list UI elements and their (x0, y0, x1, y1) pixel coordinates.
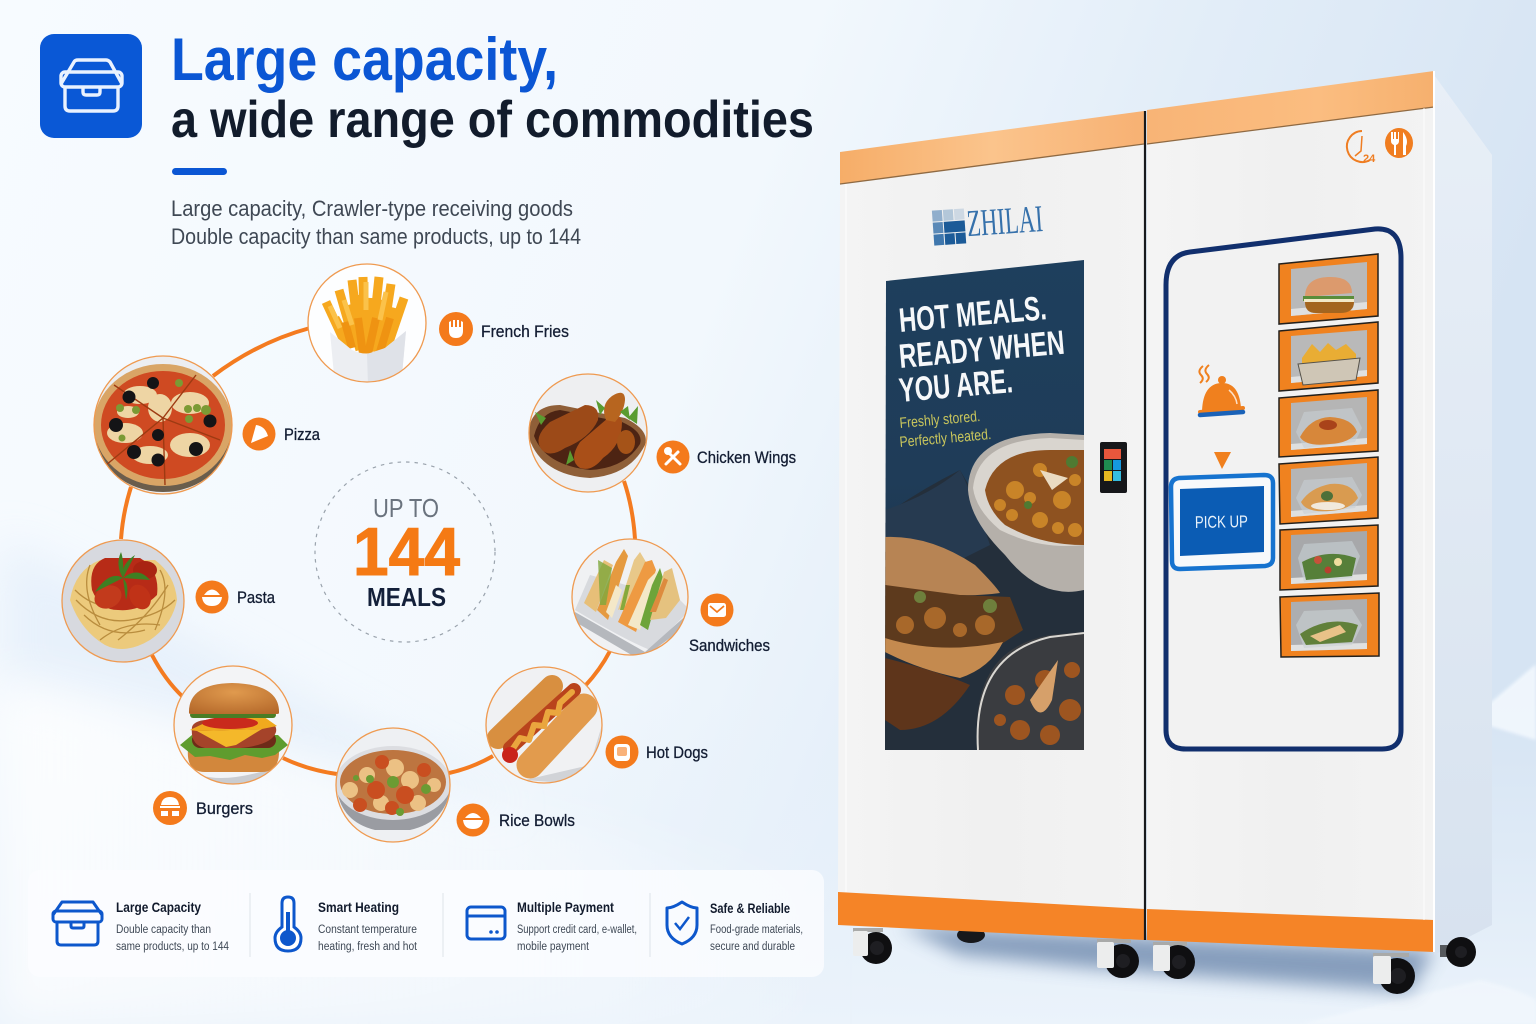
pick up button (1171, 475, 1273, 569)
icons: 24h clock and cutlery (1347, 128, 1413, 165)
top band right (1147, 71, 1434, 144)
door seam (1144, 111, 1146, 940)
poster headline: YOU ARE. (897, 362, 1014, 410)
label: Chicken Wings (656, 440, 796, 474)
pickup window frame (1166, 229, 1401, 749)
label: Sandwiches: Sandwiches (689, 636, 770, 655)
bottom band right (1147, 909, 1434, 952)
poster lower bowl (977, 632, 1084, 750)
label: Pasta: Pasta (237, 588, 275, 607)
label: French Fries (439, 312, 569, 346)
feature: large capacity: Double capacity than (116, 924, 211, 936)
center badge: up to 144 meals: 144 (353, 514, 460, 590)
feature: safe and reliable: Food-grade materials, (710, 924, 803, 936)
compartment: chicken salad (1280, 593, 1379, 657)
food: sandwiches (572, 539, 692, 660)
food: chicken wings (528, 374, 647, 492)
feature: large capacity: same products, up to 144 (116, 941, 230, 953)
machine side panel (1432, 72, 1492, 955)
label: Pizza: Pizza (284, 425, 320, 444)
ring connector arcs (121, 328, 635, 774)
poster headline: READY WHEN (897, 324, 1066, 376)
poster tagline: Perfectly heated. (899, 426, 992, 451)
label: Hot Dogs (606, 736, 708, 768)
right door (1147, 107, 1434, 920)
feature: multiple payment: mobile payment (517, 941, 590, 953)
feature: safe and reliable (667, 901, 803, 953)
compartment: fries (1279, 322, 1378, 391)
label: Burgers: Burgers (196, 799, 253, 818)
feature: multiple payment: Support credit card, e-wallet, (517, 924, 637, 936)
label: Burgers (153, 791, 253, 825)
left door (838, 144, 1144, 910)
compartment: burger (1279, 254, 1378, 324)
label: Hot Dogs: Hot Dogs (646, 743, 708, 762)
title icon: food box (40, 34, 142, 138)
front casters (853, 928, 1415, 994)
center badge: up to 144 meals (315, 462, 495, 642)
panel: feature strip (28, 870, 824, 977)
title accent dash (172, 168, 227, 175)
poster sandwich (885, 537, 1023, 730)
logo: Zhilai (932, 198, 1044, 248)
feature: safe and reliable: Safe & Reliable (710, 901, 790, 916)
icons: 24h clock and cutlery: 24 (1363, 153, 1376, 165)
feature: multiple payment (467, 900, 637, 953)
label: Chicken Wings: Chicken Wings (697, 448, 796, 467)
label: French Fries: French Fries (481, 322, 569, 341)
subtitle: Double capacity than same products, up to 144 (171, 224, 581, 249)
label: Rice Bowls: Rice Bowls (499, 811, 575, 830)
feature: smart heating: Smart Heating (318, 900, 399, 915)
compartment: salad (1280, 525, 1378, 590)
rear caster (1440, 937, 1476, 967)
food: burger (174, 666, 292, 790)
poster (885, 260, 1084, 750)
label: Pasta (196, 580, 275, 614)
food: pizza (94, 356, 232, 494)
top band left (840, 111, 1144, 184)
title (171, 26, 814, 149)
compartment: pasta (1279, 390, 1378, 457)
title: a wide range of commodities (171, 91, 814, 149)
label: Sandwiches (689, 594, 770, 655)
feature: smart heating: Constant temperature (318, 924, 417, 936)
arrow down (1214, 452, 1231, 469)
feature: smart heating: heating, fresh and hot (318, 941, 418, 953)
feature: safe and reliable: secure and durable (710, 941, 795, 953)
poster dark cloth (885, 470, 1084, 750)
poster tagline: Freshly stored. (899, 408, 981, 432)
poster headline (897, 289, 1066, 410)
center badge: up to 144 meals: MEALS (367, 582, 446, 612)
logo: Zhilai: ZHILAI (965, 198, 1044, 245)
pick up button: PICK UP (1195, 512, 1248, 532)
subtitle: Large capacity, Crawler-type receiving goods (171, 196, 573, 221)
compartment: mixed (1279, 457, 1378, 524)
subtitle (171, 196, 581, 249)
poster headline: HOT MEALS. (897, 289, 1048, 340)
food: french fries (308, 264, 426, 385)
food: hot dog (486, 667, 602, 785)
hidden caster (957, 927, 985, 943)
poster bowl (968, 433, 1084, 592)
poster tagline (899, 408, 992, 451)
bottom band left (838, 892, 1144, 940)
vending machine (838, 71, 1492, 994)
food: pasta (62, 540, 184, 662)
label: Rice Bowls (456, 804, 575, 836)
center badge: up to 144 meals: UP TO (373, 493, 439, 523)
label: Pizza (242, 418, 320, 450)
food: rice bowl (335, 728, 451, 842)
feature: large capacity: Large Capacity (116, 900, 201, 915)
machine floor shadow (900, 925, 1434, 992)
cloche icon (1199, 365, 1243, 415)
feature: multiple payment: Multiple Payment (517, 900, 614, 915)
touch screen (1100, 442, 1127, 493)
food compartments (1279, 254, 1379, 657)
feature: large capacity (53, 900, 230, 953)
title: Large capacity, (171, 26, 558, 93)
feature: smart heating (275, 897, 418, 953)
